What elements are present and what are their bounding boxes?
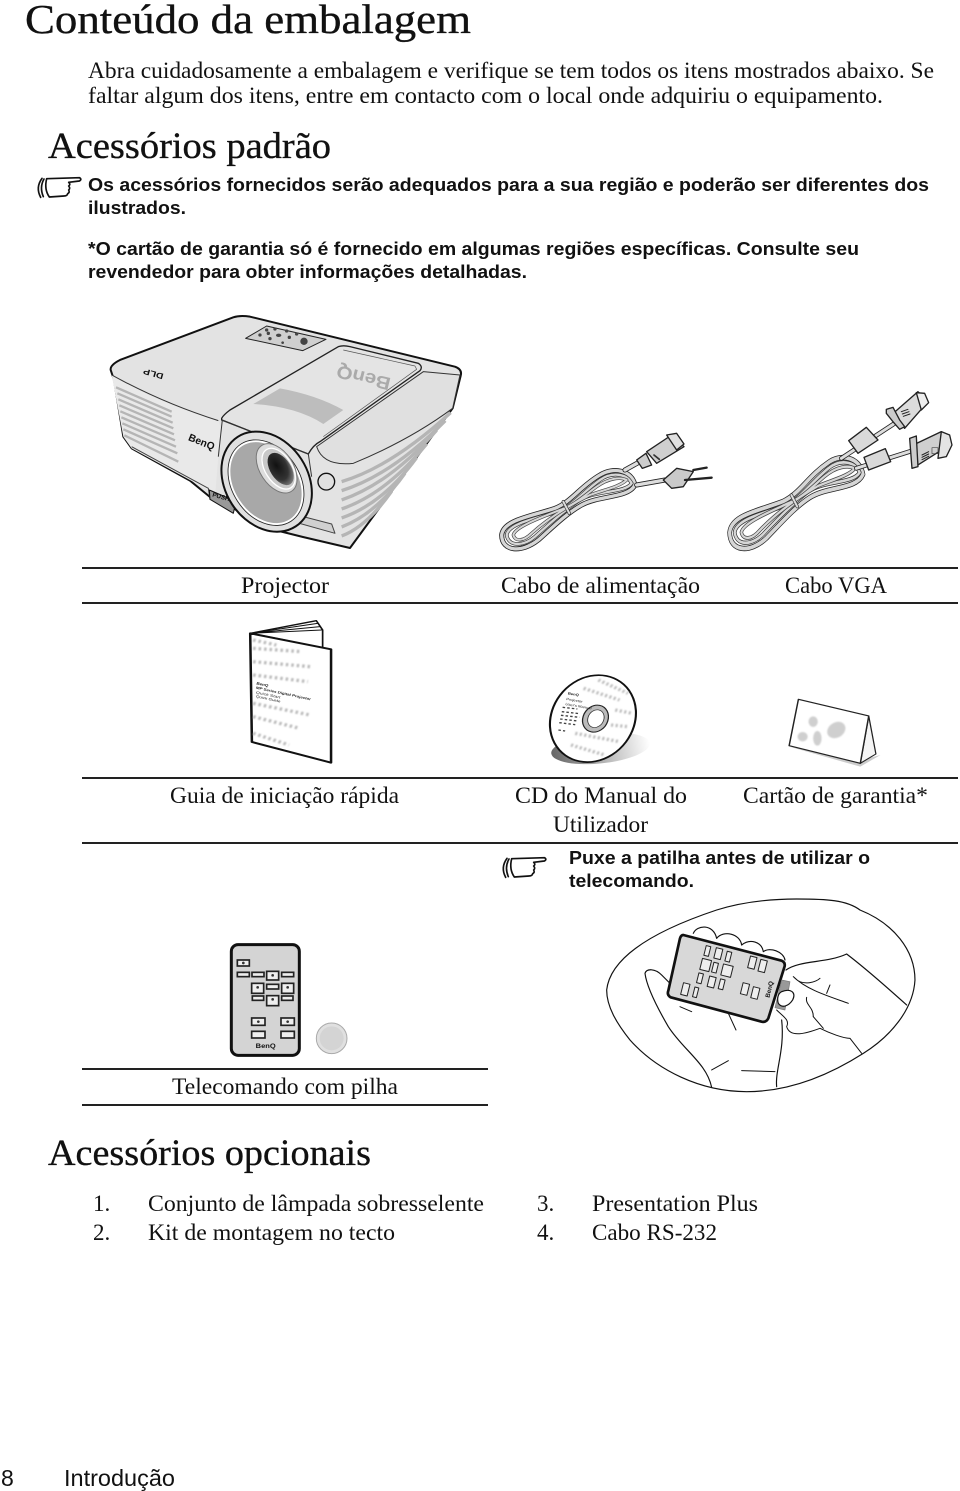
illustration: CD manual (539, 668, 652, 769)
bar under lens (293, 517, 335, 533)
list: optional accessories: Presentation Plus (592, 1191, 758, 1216)
label: CD manual (515, 783, 687, 837)
illustration: hands pulling tab: BenQ (764, 981, 775, 998)
note: pull tab: telecomando. (569, 870, 694, 891)
note: pull tab: Puxe a patilha antes de utilizar o (569, 847, 870, 868)
side panel (317, 372, 460, 464)
footer: 8 (1, 1465, 14, 1491)
heading: standard accessories: Acessórios padrão (48, 126, 331, 167)
ir sensor (318, 473, 335, 490)
intro text: faltar algum dos itens, entre em contacto com o local onde adquiriu o equipamento. (88, 83, 883, 108)
note text: Os acessórios fornecidos serão adequados para a sua região e poderão ser diferentes dos (88, 174, 929, 195)
label: VGA cable: Cabo VGA (785, 573, 887, 598)
pulling hand (786, 954, 907, 1005)
list: optional accessories: Kit de montagem no tecto (148, 1220, 395, 1245)
table rule (82, 1068, 488, 1070)
front left face (112, 375, 222, 497)
list: optional accessories: 3. (537, 1191, 554, 1216)
illustration: quick start guide: BenQ (256, 681, 270, 688)
illustration: remote control (231, 945, 299, 1055)
right vents (342, 413, 451, 536)
illustration: CD manual: BenQ (567, 692, 579, 697)
illustration: power cable (502, 433, 712, 549)
illustration: quick start guide (250, 621, 331, 763)
note text: *O cartão de garantia só é fornecido em algumas regiões específicas. Consulte seu (88, 238, 859, 259)
illustration: warranty card (789, 699, 881, 767)
list: optional accessories: 2. (93, 1220, 110, 1245)
label: warranty card: Cartão de garantia* (743, 783, 928, 808)
remote in hand (668, 935, 785, 1022)
illustration: remote control: BenQ (256, 1044, 276, 1050)
illustration: projector (111, 316, 461, 549)
illustration: battery (316, 1023, 347, 1054)
illustration: quick start guide: Quick Start (255, 691, 282, 700)
list: optional accessories (93, 1191, 758, 1245)
illustration: projector: BenQ (187, 433, 216, 453)
note: pull tab (569, 847, 870, 891)
keypad (246, 326, 326, 351)
table rule (82, 777, 958, 779)
illustration: CD manual: Projector (566, 697, 584, 704)
illustration: quick start guide: Quick Guide (255, 695, 281, 703)
icon: pointing hand note 2 (503, 858, 546, 877)
illustration: VGA cable (730, 392, 952, 548)
top sliding panel (222, 346, 421, 454)
illustration: projector: PUSH (211, 492, 231, 503)
label: remote: Telecomando com pilha (172, 1074, 398, 1099)
note text (88, 174, 929, 282)
intro text: Abra cuidadosamente a embalagem e verifique se tem todos os itens mostrados abaixo. Se (88, 58, 934, 83)
footer (1, 1465, 175, 1491)
table rule (82, 842, 958, 844)
heading: optional accessories: Acessórios opcionais (48, 1133, 371, 1174)
note text: revendedor para obter informações detalhadas. (88, 261, 527, 282)
table rule top (82, 567, 958, 569)
label: CD manual: CD do Manual do (515, 783, 687, 808)
note text: ilustrados. (88, 197, 186, 218)
illustration: hands pulling tab (607, 899, 915, 1092)
list: optional accessories: 1. (93, 1191, 110, 1216)
list: optional accessories: Conjunto de lâmpada sobresselente (148, 1191, 484, 1216)
label: power cable: Cabo de alimentação (501, 573, 700, 598)
list: optional accessories: 4. (537, 1220, 554, 1245)
push tab (209, 490, 236, 513)
icon: pointing hand note (38, 178, 81, 197)
lens (203, 414, 330, 549)
label: projector: Projector (241, 573, 329, 598)
brand marks: BenQ (334, 361, 393, 394)
intro text (88, 58, 934, 108)
illustration: projector: DLP (141, 366, 165, 381)
list: optional accessories: Cabo RS-232 (592, 1220, 717, 1245)
table rule (82, 1104, 488, 1106)
table rule (82, 602, 958, 604)
footer: Introdução (64, 1465, 175, 1491)
holding hand (645, 970, 712, 1087)
illustration: CD manual: User's Manual (565, 702, 592, 710)
label: quick start guide: Guia de iniciação rápida (170, 783, 399, 808)
label: CD manual: Utilizador (553, 812, 648, 837)
illustration: quick start guide: MP Series Digital Projector (255, 686, 312, 701)
